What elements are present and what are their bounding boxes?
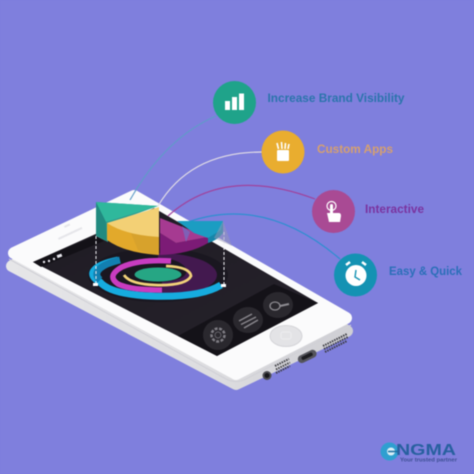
- speaker grille left: [275, 359, 290, 373]
- item: brand visibility: [213, 81, 405, 124]
- screen: [33, 208, 318, 356]
- icon: alarm clock: [334, 254, 377, 296]
- blue slice top: [177, 221, 223, 238]
- button: search: [263, 292, 293, 318]
- phone side: [12, 205, 347, 384]
- screen button tray: [178, 284, 318, 356]
- speaker grille right: [323, 334, 348, 352]
- label: Increase Brand Visibility: [268, 91, 405, 105]
- logo: [380, 442, 457, 464]
- yellow ring: [124, 266, 191, 285]
- item: interactive: [312, 190, 424, 233]
- headphone jack: [262, 371, 272, 380]
- curve: green: [130, 116, 216, 200]
- dotted guide lines: [93, 232, 226, 287]
- item: custom apps: [262, 130, 393, 174]
- teal ring accent: [97, 260, 120, 280]
- status icons: [43, 254, 62, 263]
- phone edge line: [9, 259, 351, 382]
- teal slice: [96, 202, 158, 242]
- label: Interactive: [365, 202, 424, 216]
- logo tagline: Your trusted partner: [400, 458, 457, 464]
- ring chart: [88, 248, 228, 302]
- blue slice side: [208, 221, 223, 243]
- home button: [270, 326, 302, 346]
- purple disc: [158, 253, 217, 297]
- connector curves: [130, 116, 340, 259]
- yellow slice shade: [128, 222, 159, 255]
- button: menu: [233, 307, 263, 333]
- screen status strip: [33, 236, 104, 267]
- yellow slice top: [107, 207, 159, 237]
- icon: pencil cup: [262, 130, 304, 174]
- button: settings: [203, 320, 233, 350]
- center ellipse: [134, 268, 182, 282]
- pie shadow: [214, 221, 232, 246]
- icon: pointing hand: [312, 190, 355, 233]
- blue ring: [93, 260, 221, 296]
- item: easy and quick: [334, 254, 462, 296]
- logo globe: [380, 442, 398, 460]
- curve: magenta: [168, 185, 315, 216]
- label: Custom Apps: [317, 142, 393, 156]
- curve: yellow: [158, 152, 262, 206]
- magenta slice side: [160, 233, 208, 255]
- blue reflection: [182, 226, 190, 242]
- phone front face: [14, 196, 346, 374]
- icon: bar chart: [213, 81, 256, 124]
- curve: blue: [188, 214, 340, 259]
- 3D pie chart: [96, 202, 232, 255]
- yellow slice side: [107, 223, 159, 255]
- earpiece text: [58, 223, 82, 240]
- chart backdrop: [88, 248, 228, 302]
- magenta slice top: [160, 218, 208, 243]
- charging port: [296, 348, 318, 364]
- label: Easy & Quick: [389, 264, 462, 278]
- magenta ring: [113, 261, 171, 290]
- logo name: NGMA: [396, 442, 457, 459]
- phone: [9, 196, 351, 384]
